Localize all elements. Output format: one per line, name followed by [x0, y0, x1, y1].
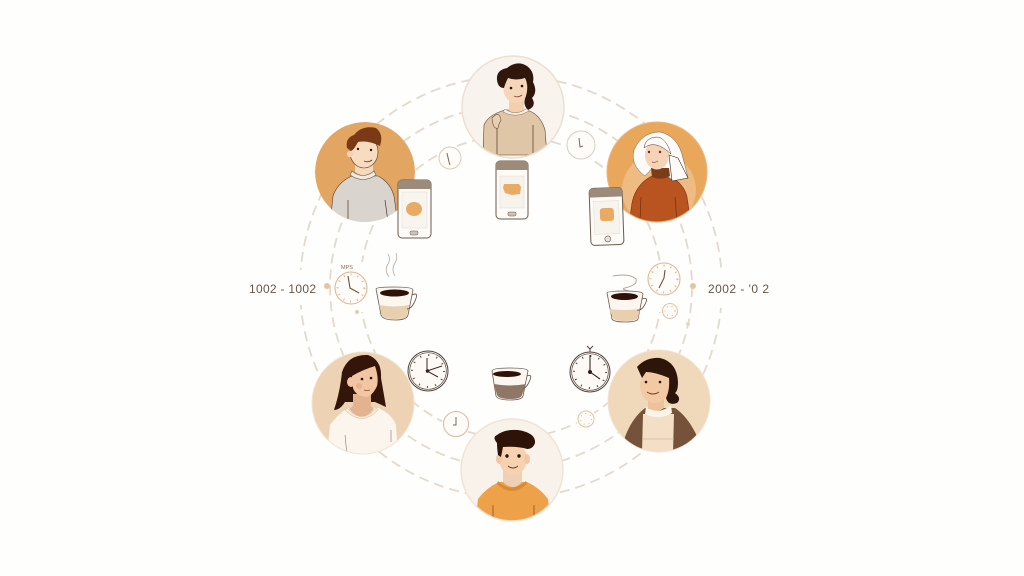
- ring gaps behind year labels: [294, 262, 730, 312]
- icon: small clock bottom right: [576, 409, 596, 429]
- icon: large clock lower left: [408, 351, 448, 391]
- icon: small clock bottom left: [442, 410, 470, 438]
- icon: small clock upper left: [437, 145, 463, 171]
- dot: right ring lower marker: [686, 322, 690, 326]
- icon: clock left with label: MPS: [341, 265, 353, 271]
- infographic canvas: [250, 55, 768, 522]
- icon: clock right: [648, 263, 680, 295]
- icon: coffee cup centre: [492, 368, 531, 400]
- portrait: bottom-left woman: [312, 352, 414, 456]
- icon: coffee cup right: [607, 275, 647, 322]
- portrait: top woman: [462, 56, 564, 158]
- icon: coffee cup left: [376, 253, 417, 320]
- icon: phone left: [398, 180, 431, 238]
- icon: small clock upper right: [565, 129, 597, 161]
- dot: left ring marker: [324, 283, 330, 289]
- dot: left ring lower marker: [355, 310, 359, 314]
- label: right year range: 2002 - '0 2: [708, 282, 769, 296]
- icon: phone right: [589, 187, 624, 246]
- dot: right ring marker: [690, 283, 696, 289]
- icon: phone centre: [496, 161, 528, 219]
- icon: tiny clock right: [662, 304, 678, 318]
- icon: clock left with label: [335, 265, 367, 304]
- icon: large clock lower right: [570, 346, 610, 392]
- portrait: top-right older woman: [607, 122, 707, 227]
- label: left year range: 1002 - 1002: [249, 282, 316, 296]
- portrait: bottom-right woman in apron: [608, 350, 710, 453]
- dashed orbit rings: [300, 76, 722, 498]
- portrait: top-left man: [315, 122, 415, 225]
- portrait: bottom man: [461, 419, 563, 525]
